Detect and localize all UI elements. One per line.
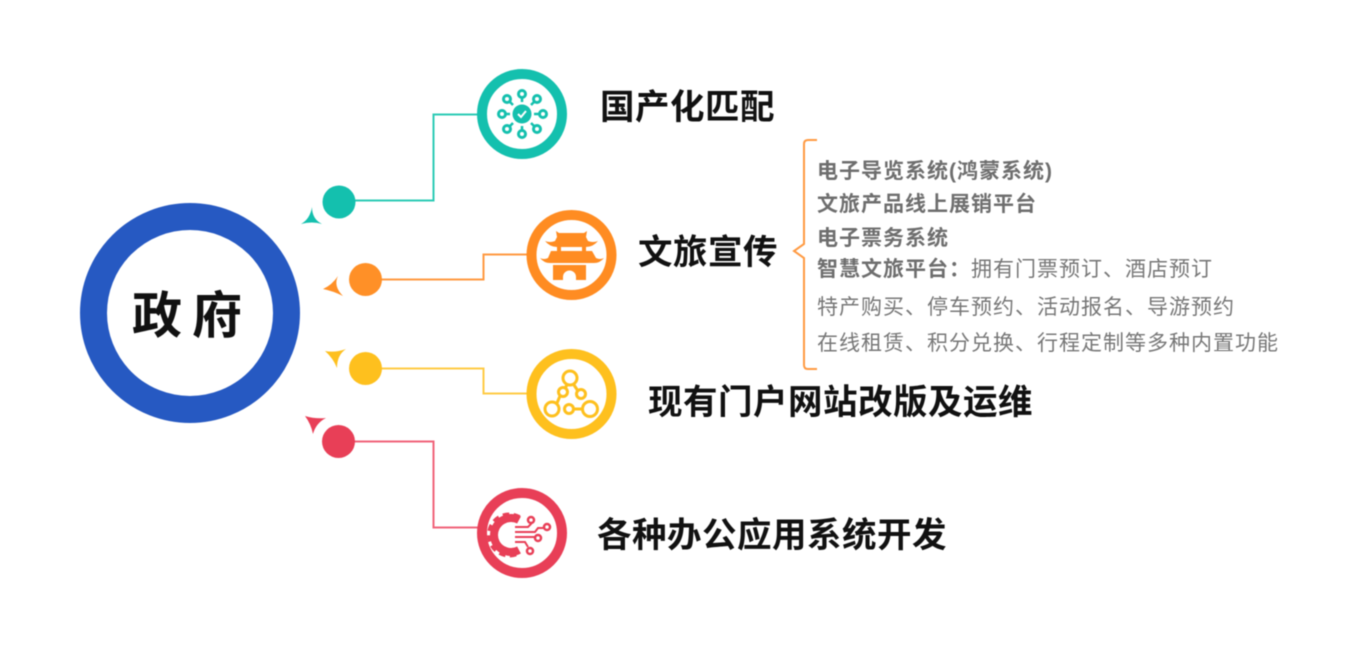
central circle: 政府	[94, 216, 286, 410]
branch: orange connector	[323, 254, 530, 296]
heading: 国产化匹配: 国产化匹配	[600, 89, 775, 127]
text block: detail list: 在线租赁、积分兑换、行程定制等多种内置功能	[817, 332, 1279, 355]
icon: teal network check	[482, 74, 562, 154]
icon: yellow linked nodes	[532, 354, 612, 434]
branch: teal connector	[301, 114, 480, 224]
icon: red gear circuit	[482, 493, 562, 573]
heading: 各种办公应用系统开发: 各种办公应用系统开发	[597, 517, 947, 555]
text block: detail list: 智慧文旅平台：拥有门票预订、酒店预订	[817, 257, 1213, 281]
text block: detail list	[817, 159, 1279, 355]
central label: 政府	[132, 288, 252, 344]
bracket: detail list	[794, 140, 817, 369]
branch: red connector	[305, 416, 480, 528]
heading: 现有门户网站改版及运维: 现有门户网站改版及运维	[648, 384, 1033, 422]
text block: detail list: 特产购买、停车预约、活动报名、导游预约	[817, 296, 1235, 319]
icon: orange gate tower	[532, 215, 612, 295]
text block: detail list: 文旅产品线上展销平台	[817, 192, 1037, 216]
branch: yellow connector	[325, 349, 530, 394]
text block: detail list: 电子导览系统(鸿蒙系统)	[817, 159, 1053, 183]
heading: 文旅宣传: 文旅宣传	[638, 234, 778, 272]
text block: detail list: 电子票务系统	[817, 226, 949, 250]
